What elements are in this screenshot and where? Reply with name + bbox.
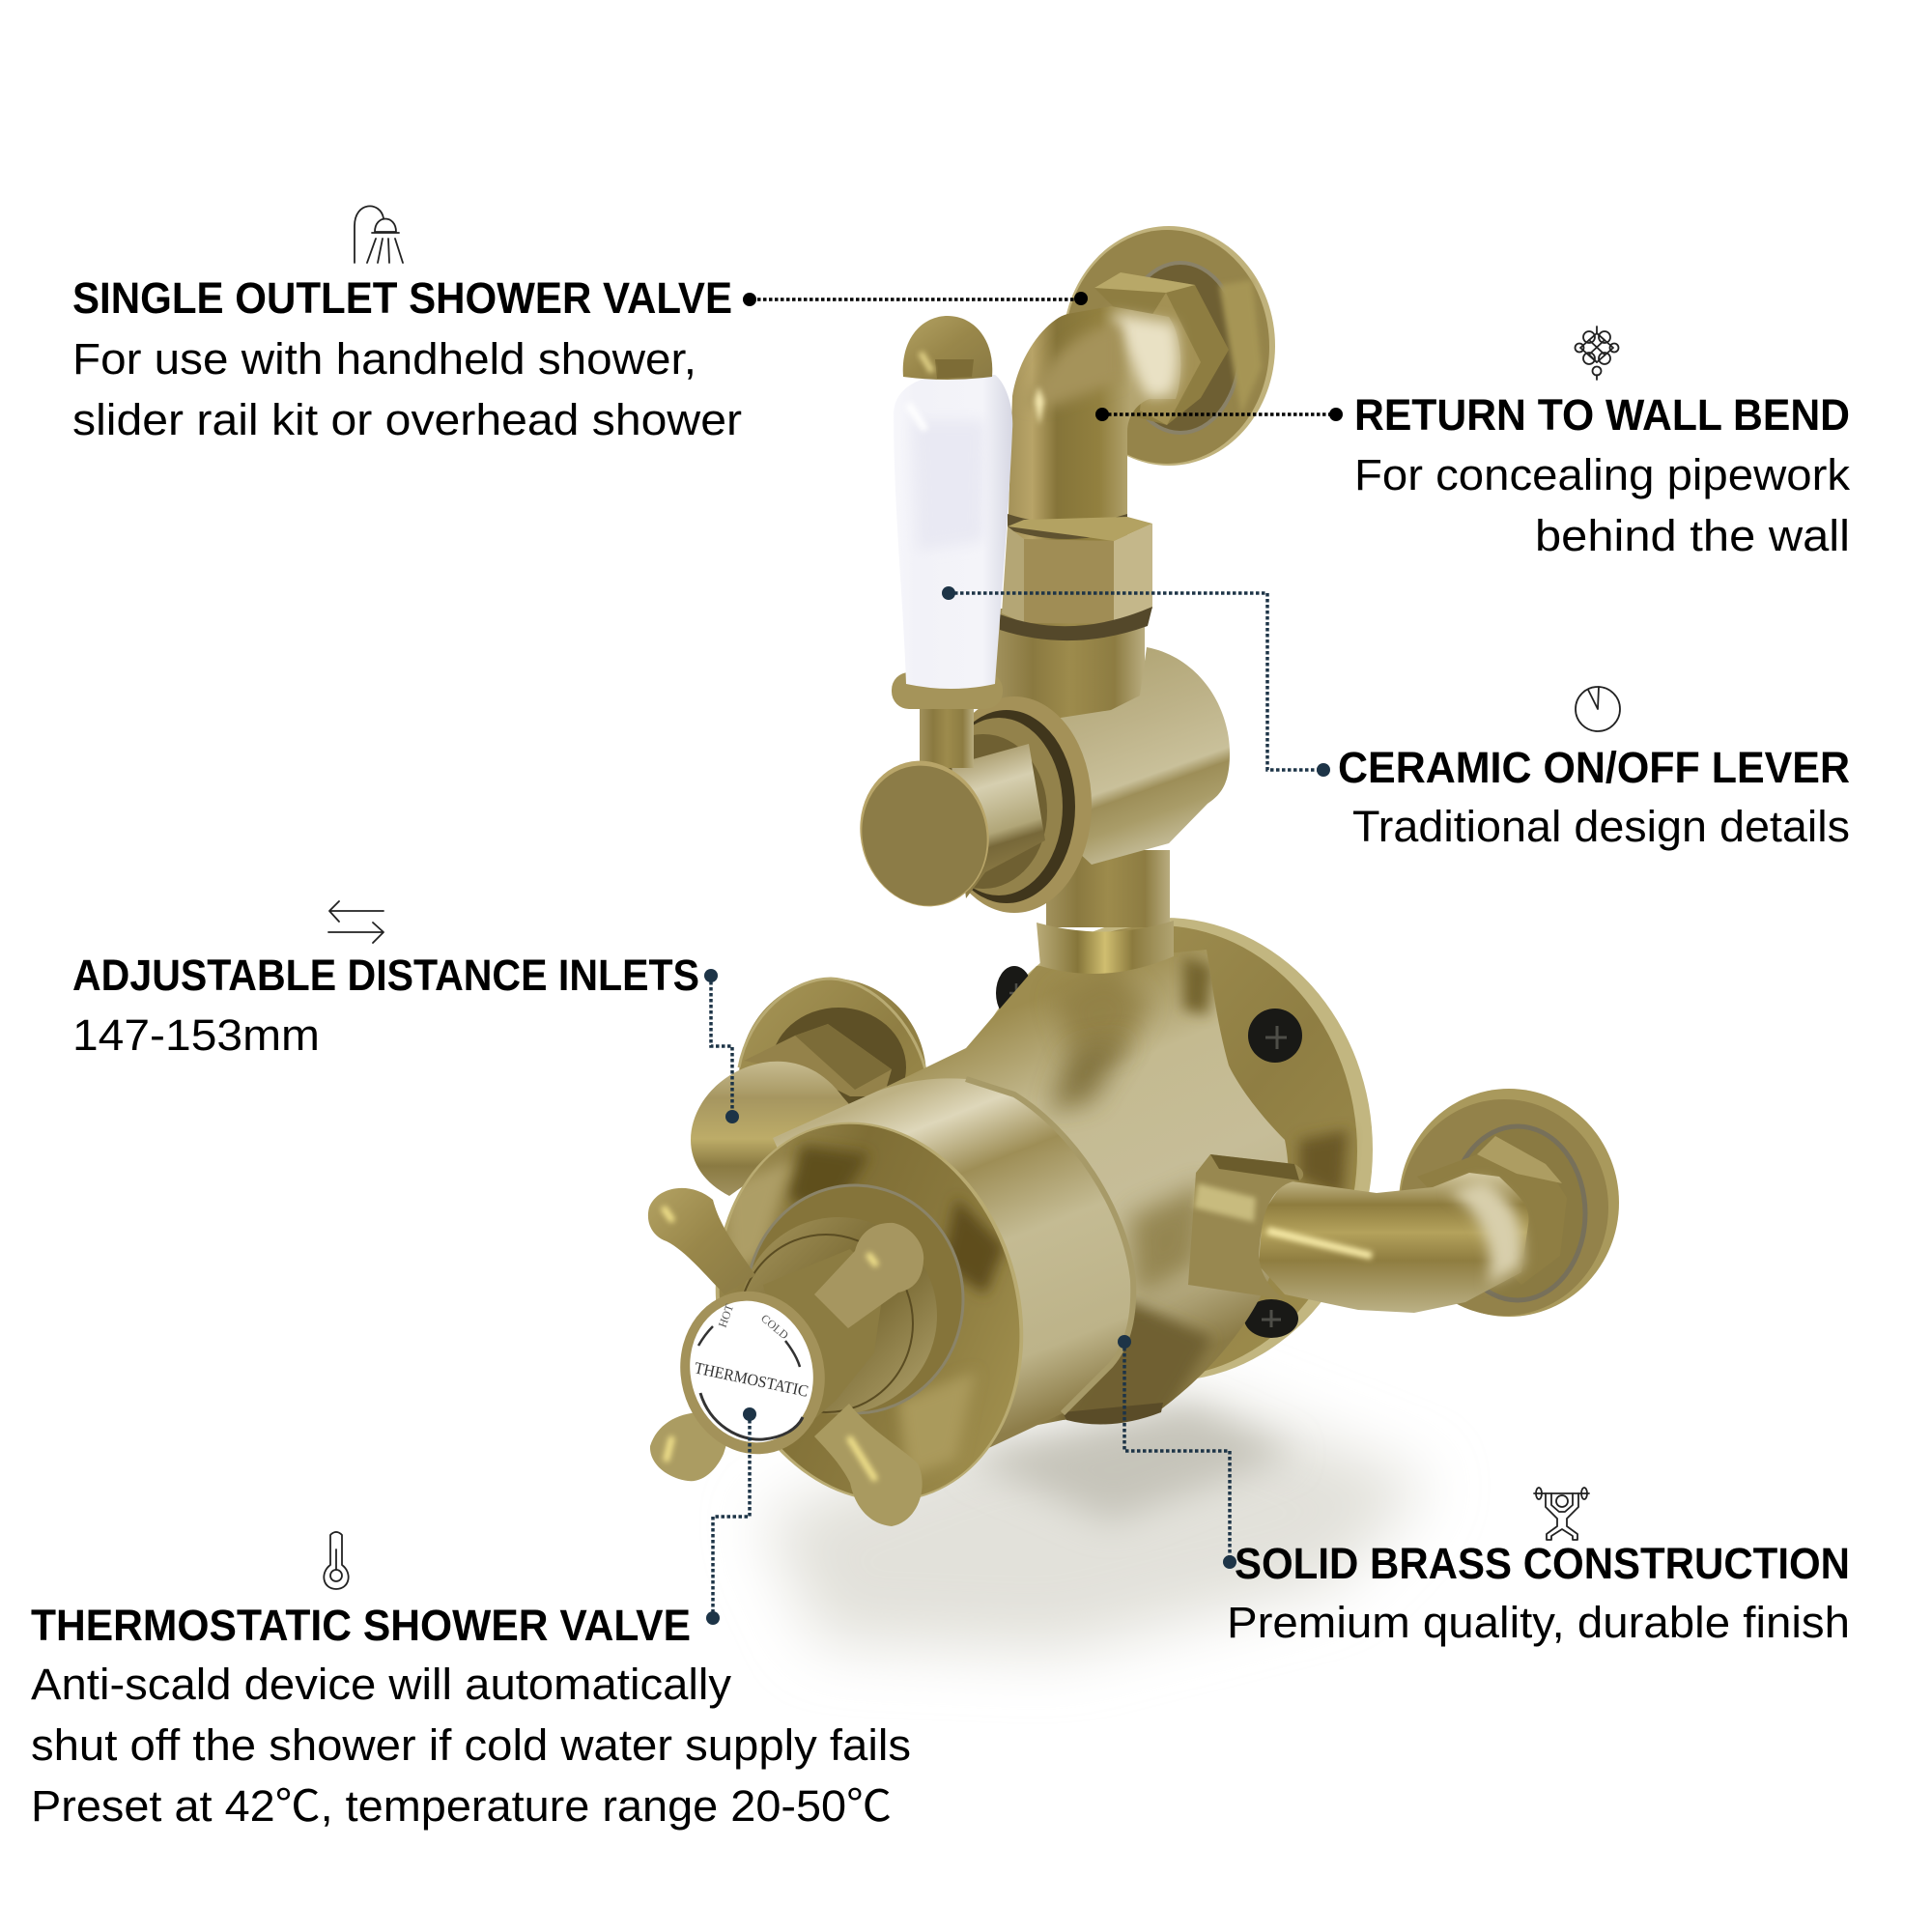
- lever collar: [892, 672, 1003, 709]
- text: solid brass: Premium quality, durable finish: [1227, 1598, 1850, 1647]
- lever stem: [920, 708, 974, 768]
- valve illustration: [648, 226, 1619, 1537]
- text: single outlet shower valve: [72, 273, 742, 444]
- text: solid brass: [1227, 1539, 1850, 1647]
- screw: upper right: [1248, 1009, 1302, 1063]
- screw: lower right: [1244, 1299, 1298, 1338]
- text: thermostatic valve: THERMOSTATIC SHOWER VALVE: [31, 1601, 691, 1650]
- lower neck: [1037, 850, 1174, 974]
- text: return to wall bend: [1354, 390, 1851, 560]
- top wall plate: [1063, 226, 1275, 466]
- dark plate patch: [1299, 1130, 1348, 1198]
- floor shadow: [763, 1396, 1430, 1652]
- arm lower right: [814, 1404, 923, 1526]
- dial: [663, 1275, 842, 1470]
- callout line: return bend: [1095, 408, 1343, 421]
- callout line: ceramic lever: [942, 586, 1330, 777]
- text: return to wall bend: For concealing pipework: [1354, 450, 1851, 499]
- lever housing: [1005, 647, 1230, 865]
- text: ceramic lever: Traditional design details: [1352, 802, 1850, 851]
- icon: shower: [355, 206, 403, 263]
- text: single outlet shower valve: slider rail kit or overhead shower: [72, 395, 742, 444]
- rear body: [876, 950, 1289, 1439]
- text: adjustable inlets: 147-153mm: [72, 1010, 320, 1060]
- text: return to wall bend: behind the wall: [1535, 511, 1850, 560]
- dial: COLD: [758, 1312, 791, 1343]
- arm upper right: [814, 1223, 923, 1328]
- text: single outlet shower valve: SINGLE OUTLET SHOWER VALVE: [72, 273, 732, 323]
- callout line: single outlet: [743, 292, 1088, 306]
- hub: [763, 1249, 884, 1430]
- text: adjustable inlets: ADJUSTABLE DISTANCE INLETS: [72, 951, 699, 1000]
- text: solid brass: SOLID BRASS CONSTRUCTION: [1235, 1539, 1850, 1588]
- rear mounting plate: [955, 918, 1373, 1381]
- text: thermostatic valve: shut off the shower if cold water supply fails: [31, 1720, 911, 1770]
- icon: endless knot: [1575, 327, 1619, 380]
- dial: THERMOSTATIC: [693, 1358, 810, 1401]
- plate: [1399, 1089, 1619, 1317]
- collar: [1188, 1154, 1303, 1299]
- boss: [740, 1217, 937, 1414]
- callout line: adjustable inlets: [704, 969, 739, 1123]
- icon: arrows: [328, 901, 384, 943]
- text: ceramic lever: CERAMIC ON/OFF LEVER: [1338, 743, 1850, 792]
- hex nut top: [1094, 272, 1229, 425]
- text: ceramic lever: [1338, 743, 1850, 851]
- callout line: solid brass: [1118, 1335, 1236, 1569]
- elbow pipe: [1008, 306, 1180, 543]
- inner groove: [747, 1185, 963, 1413]
- lever top knob: [903, 316, 992, 380]
- text: thermostatic valve: [31, 1601, 911, 1831]
- pipe: [1259, 1173, 1529, 1313]
- icon: weightlifter: [1534, 1488, 1589, 1540]
- bottom stub: [1063, 1403, 1163, 1424]
- screw: upper left: [996, 966, 1033, 1020]
- barrel band: [966, 1079, 1133, 1413]
- text: thermostatic valve: Preset at 42℃, temperature range 20-50℃: [31, 1781, 892, 1831]
- front barrel: [773, 1078, 1133, 1459]
- front flange: [715, 1122, 1024, 1497]
- neck cylinder: [995, 609, 1145, 720]
- text: single outlet shower valve: For use with handheld shower,: [72, 334, 696, 384]
- callout line: thermostatic: [706, 1407, 756, 1625]
- nut: [1417, 1136, 1567, 1285]
- text: return to wall bend: RETURN TO WALL BEND: [1354, 390, 1850, 440]
- icon: clock dial: [1576, 687, 1620, 731]
- arm lower left: [650, 1412, 734, 1481]
- housing ring: [920, 696, 1092, 913]
- lever spindle: [952, 744, 1045, 898]
- dial: HOT: [716, 1301, 736, 1329]
- right inlet: [1188, 1089, 1619, 1317]
- arm upper left: [648, 1188, 755, 1294]
- icon: thermometer: [324, 1532, 349, 1589]
- hex collar: [1000, 517, 1152, 640]
- crosshead handle: [648, 1188, 923, 1526]
- left inlet pipe: [691, 979, 926, 1196]
- lever end cap: [844, 747, 1005, 921]
- ceramic lever handle: [894, 375, 1012, 689]
- text: thermostatic valve: Anti-scald device will automatically: [31, 1660, 732, 1709]
- text: adjustable inlets: [72, 951, 699, 1060]
- highlights: [665, 1209, 875, 1478]
